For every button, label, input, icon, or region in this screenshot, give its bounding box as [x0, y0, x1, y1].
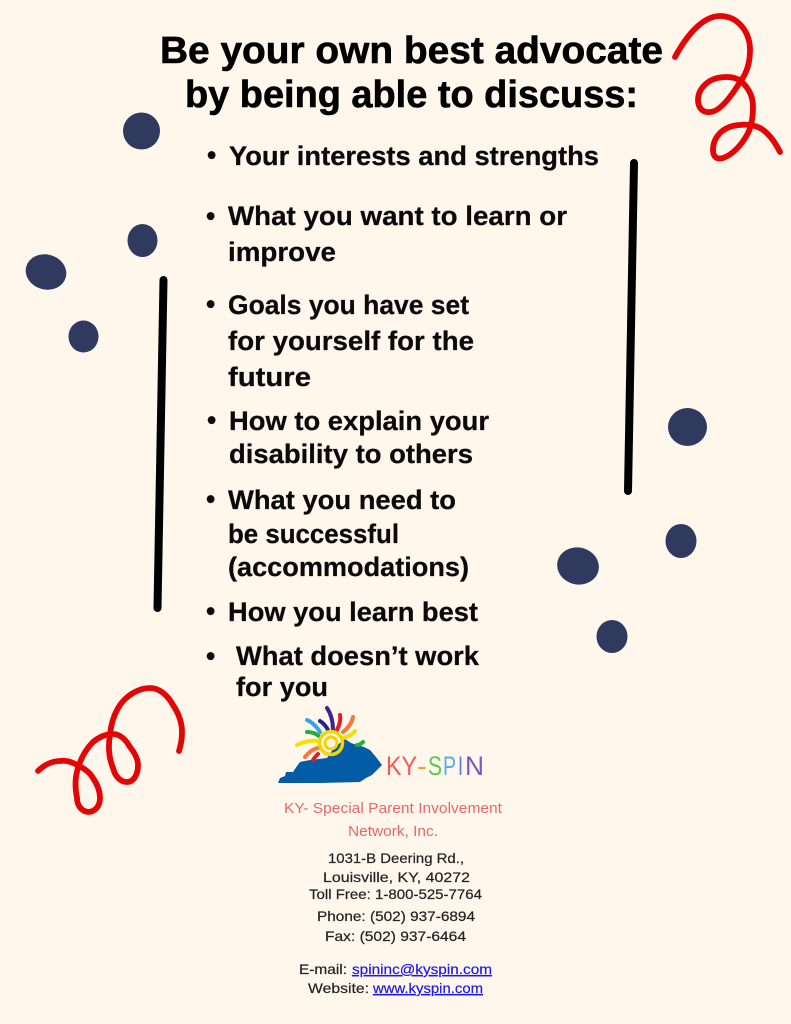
blue dots left — [22, 112, 160, 352]
icon: red squiggle top right — [675, 16, 780, 159]
organisation name — [284, 800, 503, 840]
item: disability: disability to others — [229, 439, 473, 469]
item: learn best: How you learn best — [228, 597, 478, 627]
logo wordmark: I — [458, 751, 463, 781]
item: want to learn: improve — [228, 237, 336, 267]
logo wordmark: S — [428, 751, 442, 781]
icon: sun — [320, 732, 342, 754]
contact details: www.kyspin.com — [372, 980, 483, 996]
item: goals — [206, 289, 474, 392]
right black line — [628, 163, 634, 491]
item: want to learn: • — [206, 201, 215, 231]
logo wordmark: KY — [386, 751, 417, 781]
logo wordmark: P — [443, 751, 456, 781]
item: interests: Your interests and strengths — [229, 141, 599, 171]
contact details: spininc@kyspin.com — [352, 961, 492, 977]
blue dots right — [554, 408, 707, 653]
contact details — [299, 850, 492, 996]
organisation name: KY- Special Parent Involvement — [284, 800, 503, 817]
contact details: Website: — [308, 980, 369, 996]
item: disability: How to explain your — [229, 406, 489, 436]
item: learn best: • — [206, 596, 215, 626]
item: disability — [207, 405, 489, 469]
item: accommodations: What you need to — [228, 485, 456, 515]
title: Be your own best advocate — [160, 30, 663, 72]
bullet list — [206, 140, 599, 702]
logo wordmark — [386, 751, 484, 781]
KY-SPIN logo — [278, 708, 484, 783]
item: goals: for yourself for the — [228, 326, 474, 356]
contact details: E-mail: — [299, 961, 347, 977]
item: accommodations: be successful — [228, 519, 399, 549]
logo wordmark: N — [465, 751, 484, 781]
contact details: 1031-B Deering Rd., — [328, 850, 464, 866]
item: accommodations — [206, 484, 469, 582]
item: goals: Goals you have set — [228, 290, 469, 320]
icon: red squiggle bottom left — [38, 688, 182, 812]
icon: sun rays — [297, 708, 363, 760]
left black line — [158, 280, 164, 608]
icon: Kentucky map — [278, 739, 382, 783]
contact details: Fax: (502) 937-6464 — [325, 928, 466, 944]
item: disability: • — [207, 405, 216, 435]
title — [160, 30, 663, 116]
item: doesn't work: What doesn’t work — [236, 641, 479, 671]
item: accommodations: (accommodations) — [228, 552, 469, 582]
item: interests: • — [207, 140, 216, 170]
contact details: Louisville, KY, 40272 — [323, 869, 470, 885]
organisation name: Network, Inc. — [348, 823, 438, 840]
title: by being able to discuss: — [185, 74, 638, 116]
contact details: Toll Free: 1-800-525-7764 — [309, 886, 482, 902]
item: want to learn — [206, 201, 567, 267]
item: doesn't work: • — [206, 641, 215, 671]
contact details: Phone: (502) 937-6894 — [317, 908, 475, 924]
item: goals: • — [206, 289, 215, 319]
item: doesn't work: for you — [236, 672, 328, 702]
item: want to learn: What you want to learn or — [228, 201, 567, 231]
item: accommodations: • — [206, 484, 215, 514]
item: goals: future — [228, 362, 311, 392]
logo wordmark: - — [417, 751, 427, 781]
item: doesn't work — [206, 641, 479, 702]
